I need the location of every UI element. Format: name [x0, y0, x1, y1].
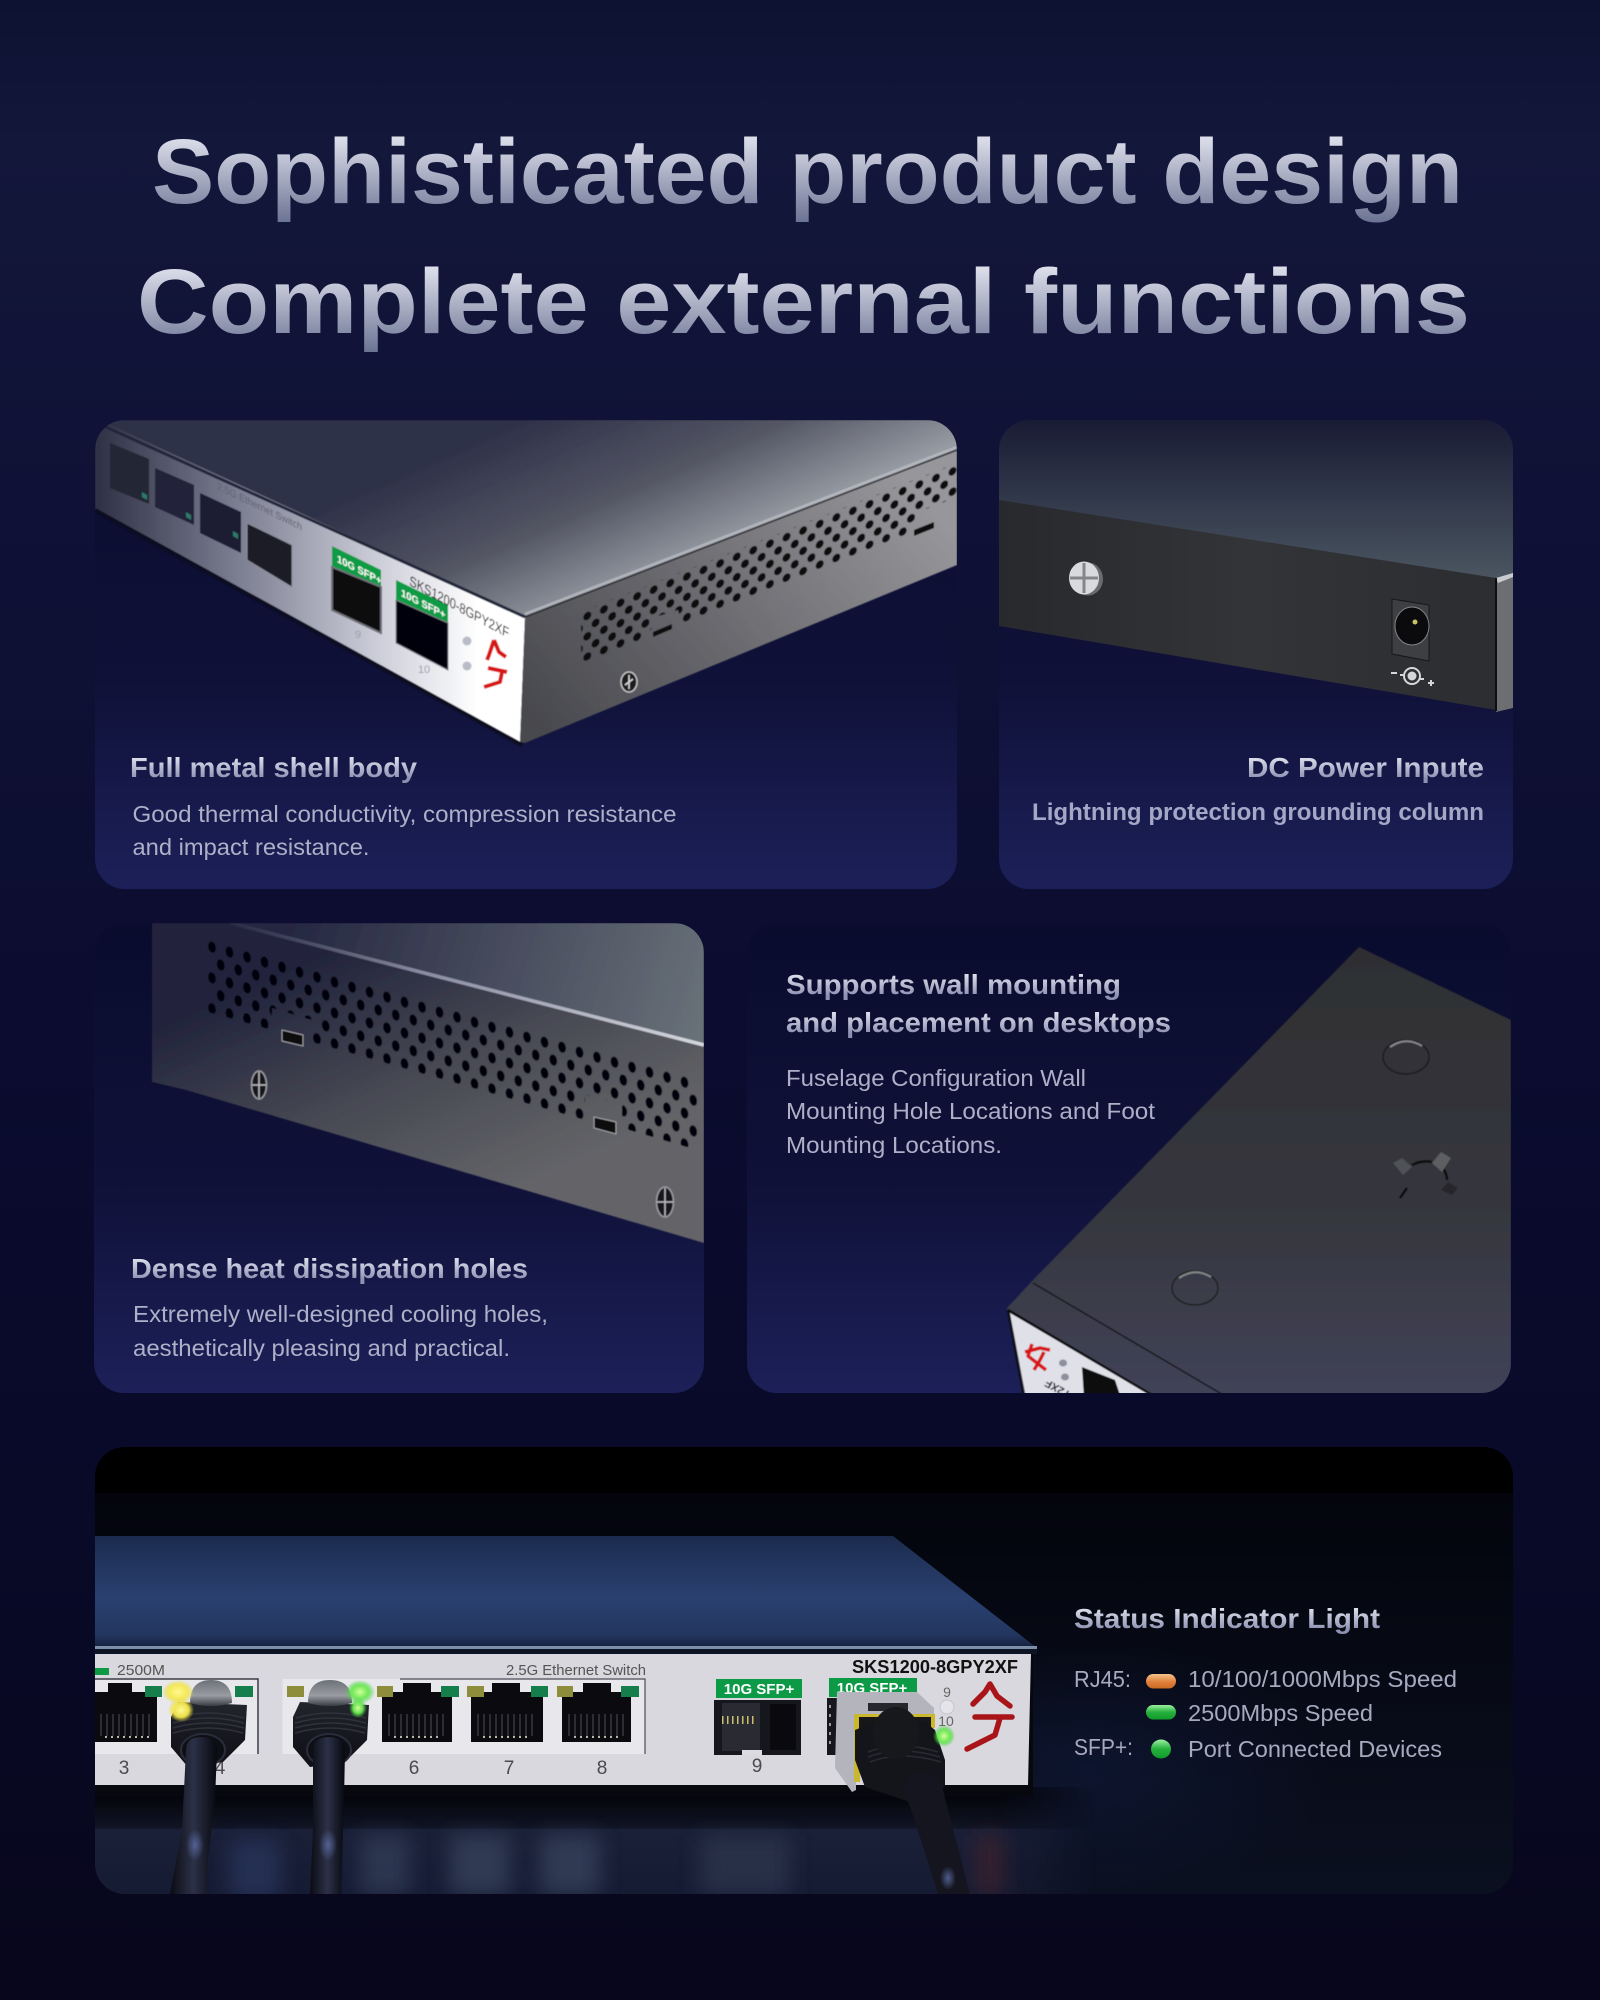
- switch corner illustration: SKS1200-8GPY2XF: [409, 572, 510, 641]
- icon: wall mount keyhole: [1393, 1152, 1458, 1198]
- description: full metal shell body: Good thermal conductivity, compression resistance: [132, 801, 676, 827]
- heading: status indicator light: Status Indicator Light: [1074, 1603, 1380, 1634]
- icon: green indicator: [1146, 1705, 1176, 1720]
- switch corner illustration: 10G SFP+: [401, 587, 445, 622]
- port numbers: 6: [409, 1758, 419, 1779]
- description: full metal shell body: [132, 801, 676, 860]
- SFP port 9: 10G SFP+: [724, 1681, 794, 1698]
- description: lightning protection: Lightning protection grounding column: [1032, 799, 1484, 826]
- RJ45 plug left: [170, 1680, 247, 1894]
- icon: rubber foot bottom: [1172, 1271, 1218, 1305]
- heading: wall mounting: [786, 969, 1171, 1038]
- legend: status lights: 10/100/1000Mbps Speed: [1188, 1666, 1457, 1692]
- description: mounting locations: Mounting Locations.: [786, 1132, 1002, 1158]
- switch corner illustration: 9: [355, 629, 361, 641]
- port numbers: [120, 1758, 762, 1774]
- title: Complete external functions: [137, 251, 1470, 353]
- port numbers: 8: [597, 1758, 607, 1779]
- switch side illustration: [152, 923, 704, 1243]
- switch rear illustration: [999, 420, 1513, 712]
- icon: polarity symbol: [1391, 668, 1434, 686]
- title: Sophisticated product design: [152, 121, 1463, 223]
- port numbers: 3: [119, 1758, 129, 1779]
- status LEDs and logo: [938, 1684, 1012, 1749]
- heading: DC power input: DC Power Inpute: [1247, 752, 1484, 783]
- switch corner illustration: 10G SFP+: [337, 553, 381, 588]
- model and legend labels: [95, 1660, 1018, 1675]
- description: mounting locations: Mounting Hole Locations and Foot: [786, 1098, 1155, 1124]
- description: cooling holes: Extremely well-designed cooling holes,: [133, 1301, 548, 1327]
- legend: status lights: 2500Mbps Speed: [1188, 1700, 1373, 1726]
- model and legend labels: 2.5G Ethernet Switch: [506, 1662, 646, 1679]
- legend: status lights: Port Connected Devices: [1188, 1736, 1442, 1762]
- panel: full metal shell body: [95, 418, 957, 889]
- legend: status lights: [1074, 1666, 1457, 1762]
- status LEDs and logo: 9: [943, 1684, 951, 1700]
- description: full metal shell body: and impact resistance.: [132, 834, 370, 860]
- icon: DC power jack: [1392, 599, 1429, 661]
- icon: SFP indicator: [1151, 1740, 1171, 1758]
- description: mounting locations: [786, 1065, 1155, 1158]
- description: cooling holes: [133, 1301, 548, 1361]
- ethernet cables: [170, 1680, 970, 1894]
- heading: wall mounting: and placement on desktops: [786, 1007, 1171, 1038]
- status LEDs and logo: 10: [938, 1713, 954, 1729]
- panel: dense heat dissipation holes: [94, 923, 704, 1393]
- panel: status indicator light: [95, 1447, 1513, 1900]
- icon: rubber foot top: [1383, 1040, 1429, 1074]
- floor reflection: [95, 1787, 1095, 1900]
- switch front plate: [95, 1654, 1033, 1796]
- panel: DC power input: [999, 420, 1513, 889]
- switch underside illustration: [1007, 947, 1511, 1404]
- SFP port 9: [714, 1679, 802, 1755]
- LED glows: [162, 1680, 955, 1747]
- heading: dense heat dissipation holes: Dense heat dissipation holes: [131, 1253, 528, 1284]
- icon: orange indicator: [1146, 1674, 1176, 1688]
- legend: status lights: SFP+:: [1074, 1734, 1133, 1760]
- heading: wall mounting: Supports wall mounting: [786, 969, 1121, 1000]
- switch corner illustration: 10: [418, 664, 430, 676]
- RJ45 port groups: [95, 1679, 646, 1754]
- switch underside illustration: PY2XF: [1043, 1376, 1079, 1404]
- legend: status lights: RJ45:: [1074, 1666, 1131, 1692]
- SFP port 10 with module: [827, 1678, 935, 1792]
- switch front illustration: [95, 1536, 1095, 1900]
- title: [137, 121, 1470, 353]
- description: cooling holes: aesthetically pleasing and practical.: [133, 1335, 510, 1361]
- switch corner illustration: 2.5G Ethernet Switch: [217, 481, 302, 534]
- icon: grounding screw: [1069, 562, 1103, 596]
- description: mounting locations: Fuselage Configuration Wall: [786, 1065, 1086, 1091]
- heading: full metal shell body: Full metal shell body: [130, 752, 417, 783]
- RJ45 plug right: [855, 1707, 970, 1894]
- RJ45 plug middle: [293, 1680, 369, 1894]
- switch top surface: [95, 1536, 1037, 1648]
- model and legend labels: SKS1200-8GPY2XF: [852, 1657, 1018, 1677]
- switch corner illustration: [95, 418, 957, 745]
- panel: wall mounting: [747, 923, 1511, 1404]
- model and legend labels: 2500M: [117, 1662, 165, 1679]
- port numbers: 9: [752, 1756, 762, 1777]
- port numbers: 4: [215, 1758, 226, 1779]
- port numbers: 7: [504, 1758, 514, 1779]
- SFP port 10 with module: 10G SFP+: [837, 1680, 907, 1697]
